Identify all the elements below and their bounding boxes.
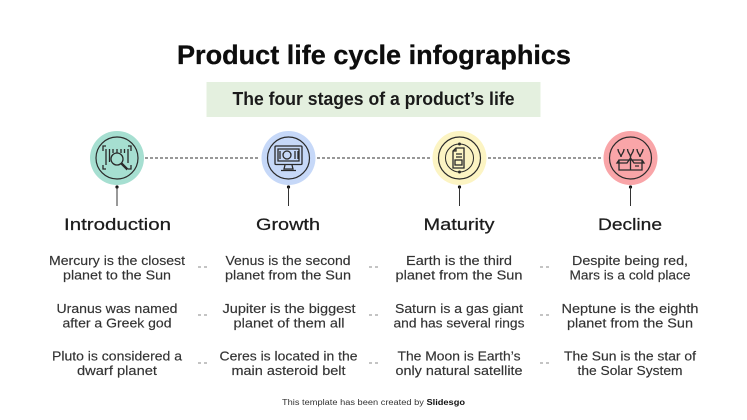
stage: growth icon xyxy=(262,131,316,185)
pin: growth xyxy=(287,185,290,206)
subtitle banner: The four stages of a product’s life xyxy=(232,89,514,109)
column: maturity text: only natural satellite xyxy=(396,364,523,378)
stage: decline icon xyxy=(604,131,658,185)
title: Product life cycle infographics xyxy=(177,40,571,70)
column: maturity text: and has several rings xyxy=(394,316,524,330)
heading: Maturity: Maturity xyxy=(424,215,495,234)
column: introduction text: planet to the Sun xyxy=(63,268,171,282)
column: introduction text: Mercury is the closest xyxy=(49,254,186,268)
heading: Growth: Growth xyxy=(256,215,320,234)
column: growth text: planet of them all xyxy=(234,316,344,330)
pin: maturity xyxy=(458,185,461,206)
column: decline text xyxy=(562,254,699,378)
stage: maturity icon xyxy=(432,131,486,185)
column: introduction text: Pluto is considered a xyxy=(52,350,182,364)
heading: Introduction: Introduction xyxy=(64,215,171,234)
heading: Decline: Decline xyxy=(598,215,662,234)
column: decline text: Neptune is the eighth xyxy=(562,302,699,316)
column: growth text: Venus is the second xyxy=(226,254,351,268)
column: maturity text: planet from the Sun xyxy=(396,268,523,282)
column: growth text: Jupiter is the biggest xyxy=(222,302,356,316)
row separators xyxy=(198,267,549,363)
column: growth text: planet from the Sun xyxy=(225,268,351,282)
column: maturity text: The Moon is Earth’s xyxy=(398,350,520,364)
column: decline text: Mars is a cold place xyxy=(570,268,691,282)
column: growth text: main asteroid belt xyxy=(232,364,346,378)
column: maturity text: Earth is the third xyxy=(406,254,512,268)
column: decline text: the Solar System xyxy=(578,364,682,378)
column: maturity text xyxy=(394,254,524,378)
column: decline text: Despite being red, xyxy=(572,254,688,268)
column: introduction text: dwarf planet xyxy=(77,364,158,378)
timeline dotted connector xyxy=(145,157,602,159)
pin: introduction xyxy=(115,185,119,206)
pin: decline xyxy=(629,185,632,206)
column: maturity text: Saturn is a gas giant xyxy=(395,302,524,316)
column: introduction text: after a Greek god xyxy=(62,316,172,330)
footer credit: This template has been created by Slidesgo xyxy=(282,398,465,407)
stage: introduction icon xyxy=(90,131,144,185)
column: decline text: planet from the Sun xyxy=(567,316,693,330)
subtitle banner xyxy=(206,82,540,117)
column: introduction text: Uranus was named xyxy=(56,302,178,316)
column: growth text xyxy=(220,254,358,378)
column: growth text: Ceres is located in the xyxy=(220,350,358,364)
column: introduction text xyxy=(49,254,186,378)
column: decline text: The Sun is the star of xyxy=(564,350,697,364)
